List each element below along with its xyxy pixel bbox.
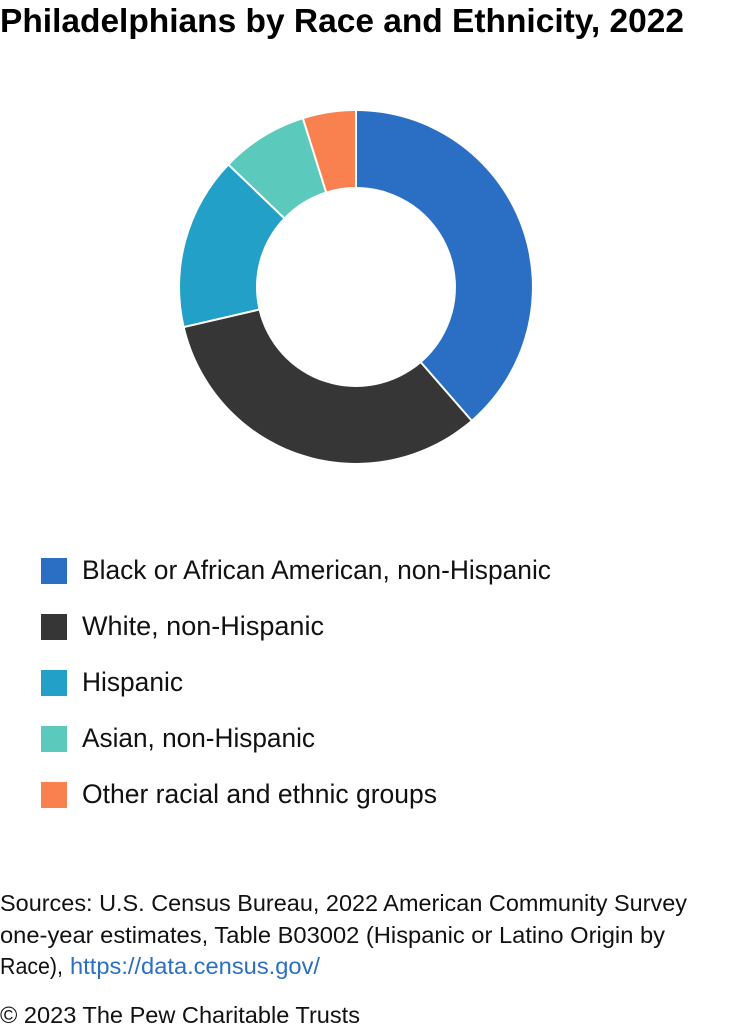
sources note bbox=[0, 890, 687, 979]
legend item: Other: Other racial and ethnic groups bbox=[82, 779, 437, 809]
legend item: White: White, non-Hispanic bbox=[82, 611, 324, 641]
slice: Hispanic bbox=[180, 165, 284, 327]
legend item: Hispanic bbox=[41, 667, 183, 697]
slice: Other bbox=[303, 111, 356, 192]
legend bbox=[41, 555, 551, 809]
sources note: Race), bbox=[0, 953, 63, 979]
legend item: Asian: Asian, non-Hispanic bbox=[82, 723, 315, 753]
legend item: Hispanic: Hispanic bbox=[82, 667, 183, 697]
legend item: Black or African American: Black or African American, non-Hispanic bbox=[82, 555, 551, 585]
donut chart bbox=[180, 110, 532, 463]
slice: Asian bbox=[229, 119, 326, 218]
sources note: https://data.census.gov/ bbox=[70, 953, 321, 979]
slice: Black or African American bbox=[356, 111, 532, 420]
sources note: Sources: U.S. Census Bureau, 2022 American Community Survey bbox=[0, 890, 687, 916]
slice: White bbox=[185, 310, 471, 463]
title: Philadelphians by Race and Ethnicity, 2022 bbox=[0, 2, 684, 39]
sources note: one-year estimates, Table B03002 (Hispanic or Latino Origin by bbox=[0, 922, 666, 948]
copyright: © 2023 The Pew Charitable Trusts bbox=[0, 1002, 360, 1028]
